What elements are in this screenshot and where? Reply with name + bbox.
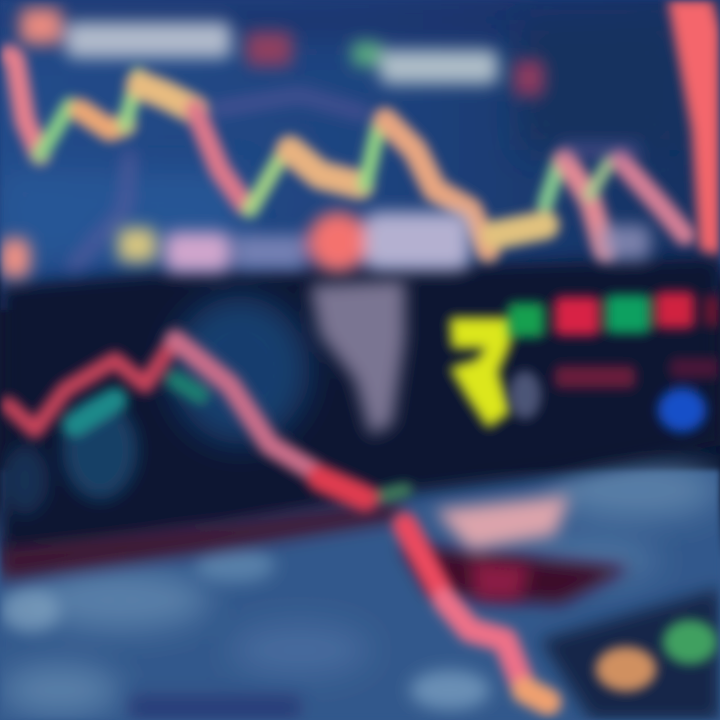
chart: faint purple secondary line [70,95,640,270]
panel: upper chart background [0,0,720,310]
panel: horizontal highlight row [0,212,650,278]
panel: dark middle band [0,258,720,720]
bar: red spike top right [668,0,720,255]
chart: lower falling price line [8,340,548,702]
legend: lower right pills [596,620,717,691]
panel: lower map background [0,460,720,720]
callout: pale pink banner [435,495,570,600]
icon: yellow symbol [450,318,518,428]
icon: grey pillar shape [310,280,405,435]
panel: label chips row [20,8,544,96]
legend: coloured status blocks [508,292,720,432]
chart: upper price line [10,55,685,250]
